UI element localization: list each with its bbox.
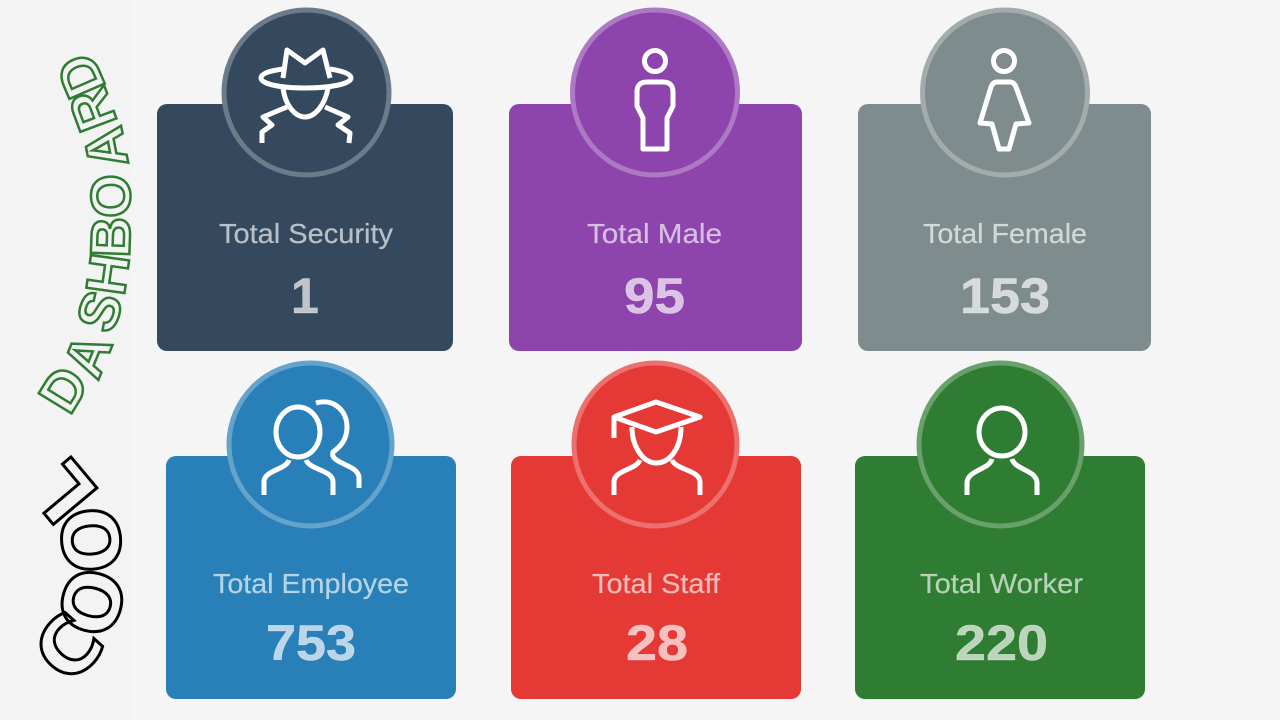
side title: COOL: COOL — [15, 443, 146, 700]
value: 28: 28 — [626, 615, 688, 671]
value: 1: 1 — [291, 268, 319, 324]
value: 95: 95 — [624, 268, 685, 324]
label: Total Male: Total Male — [587, 218, 722, 249]
icon: security agent with hat — [261, 50, 351, 143]
card: Total Female — [858, 8, 1151, 351]
value: 220: 220 — [955, 615, 1048, 671]
side title: DASHBOARD: DASHBOARD — [26, 45, 143, 423]
icon: male figure — [637, 50, 673, 149]
card: Total Staff — [511, 360, 801, 699]
card: Total Security — [157, 8, 453, 351]
icon: two people — [264, 402, 359, 495]
icon: graduate with cap — [614, 402, 700, 495]
label: Total Security: Total Security — [219, 218, 393, 249]
value: 153: 153 — [960, 268, 1050, 324]
label: Total Employee: Total Employee — [213, 568, 409, 599]
icon: female figure — [980, 50, 1029, 149]
label: Total Staff: Total Staff — [592, 568, 720, 599]
icon: single person — [967, 408, 1037, 495]
label: Total Worker: Total Worker — [920, 568, 1083, 599]
card: Total Worker — [855, 360, 1145, 699]
card: Total Male — [509, 8, 802, 351]
label: Total Female: Total Female — [923, 218, 1087, 249]
value: 753: 753 — [266, 615, 356, 671]
card: Total Employee — [166, 360, 456, 699]
